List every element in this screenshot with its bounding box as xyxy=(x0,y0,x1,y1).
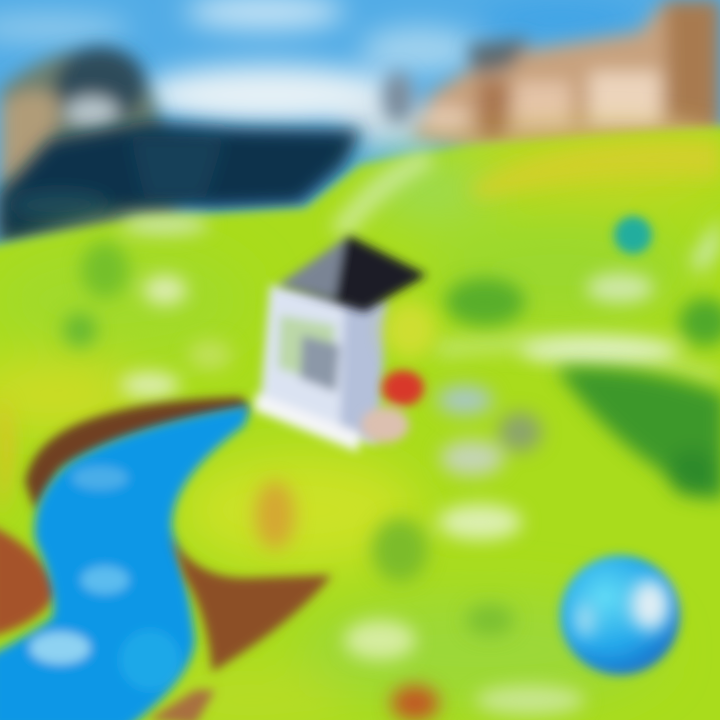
house xyxy=(254,236,427,452)
distant cliffs: right xyxy=(383,0,720,155)
dark forest band xyxy=(0,122,362,245)
garden stones xyxy=(384,302,542,476)
distant mountains: left xyxy=(0,47,180,240)
house body xyxy=(254,285,388,452)
river xyxy=(0,405,250,720)
meadow shrubs and highlights xyxy=(63,215,720,720)
sky xyxy=(0,0,720,260)
icon: globe xyxy=(560,555,680,675)
cliff bank xyxy=(148,535,332,720)
red door xyxy=(361,370,424,443)
river banks xyxy=(0,397,250,637)
house roof xyxy=(278,236,427,312)
teal marker xyxy=(614,216,652,254)
dark green field xyxy=(556,367,720,499)
